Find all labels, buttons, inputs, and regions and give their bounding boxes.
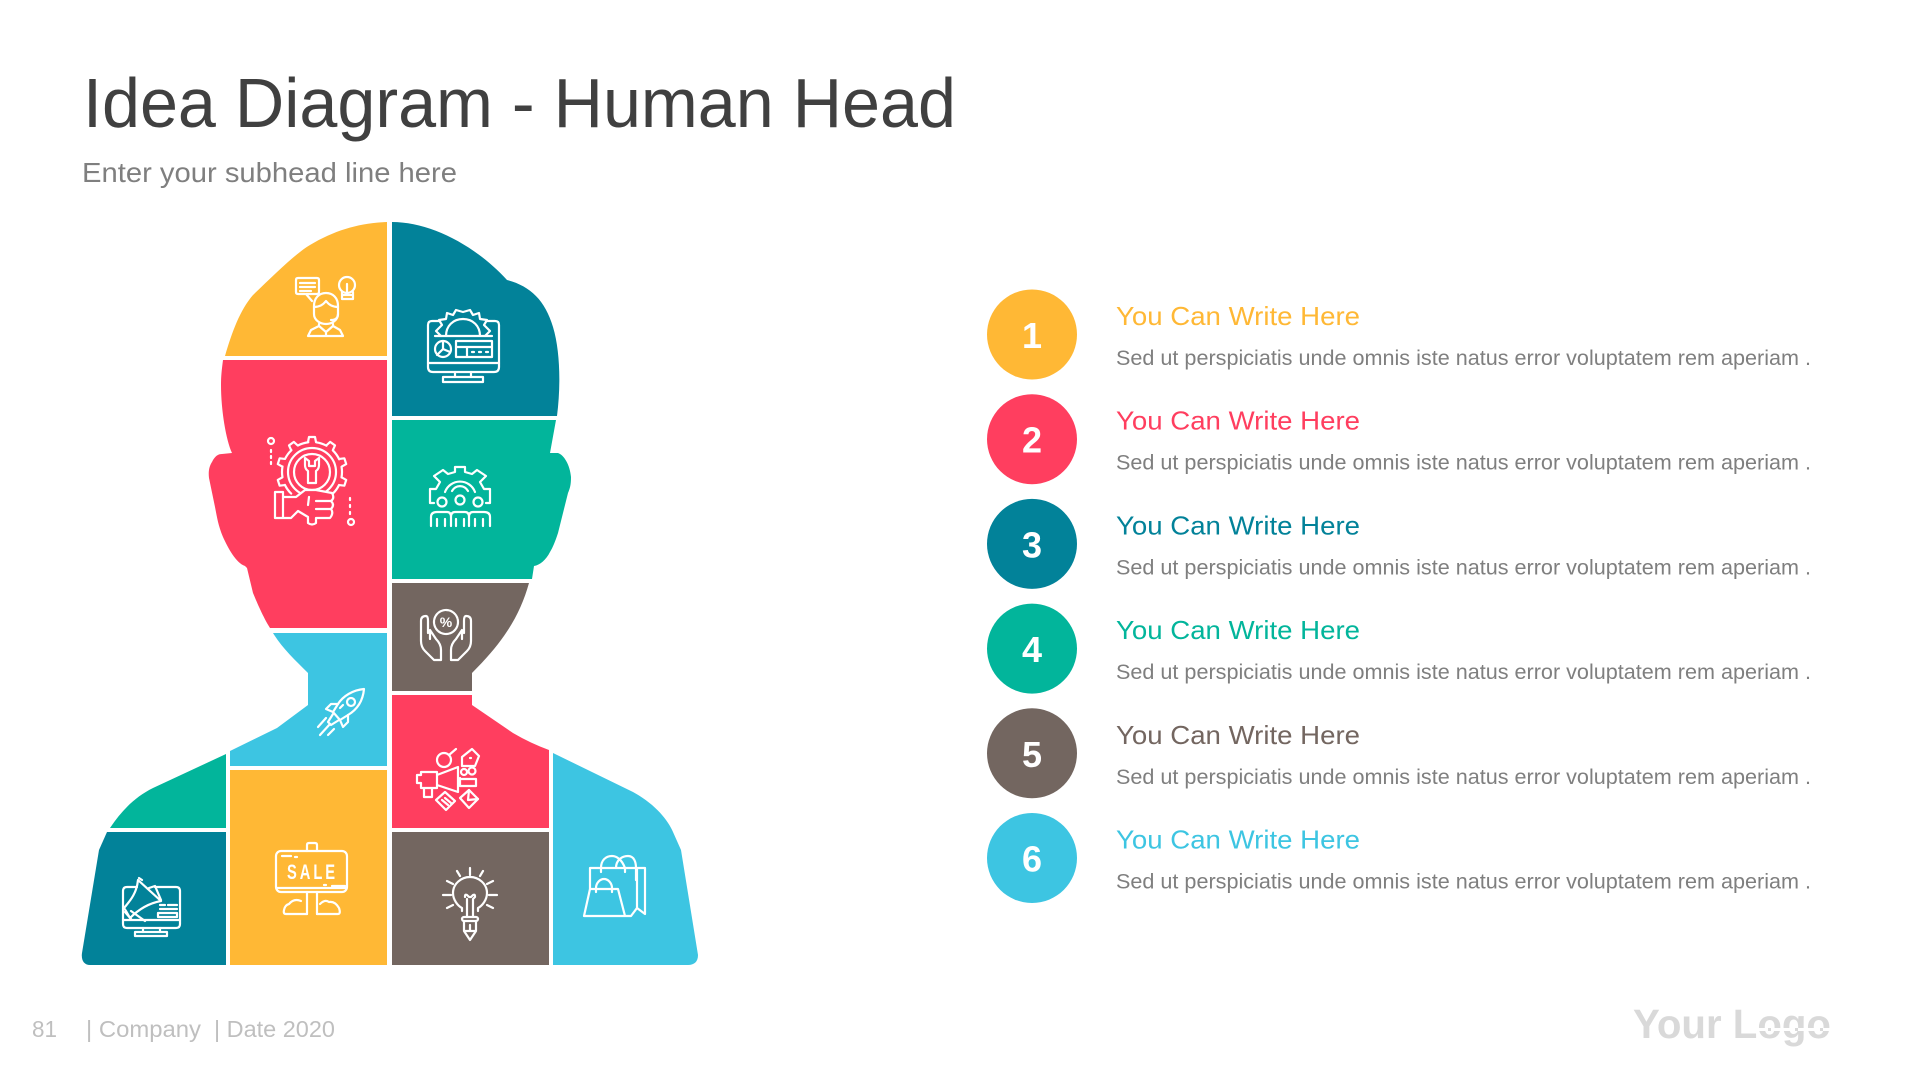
item 3: 3 — [1022, 524, 1042, 565]
segment: red chest — [392, 695, 549, 828]
head diagram — [82, 222, 698, 965]
item 4: You Can Write Here — [1116, 615, 1360, 645]
icon: shopping bags — [584, 856, 645, 916]
item 2: You Can Write Here — [1116, 406, 1360, 436]
segment: green face — [392, 420, 571, 579]
item 3: You Can Write Here — [1116, 510, 1360, 540]
item 6: Sed ut perspiciatis unde omnis iste natus error voluptatem rem aperiam . — [1116, 870, 1811, 894]
icon: hands holding percent badge: % — [440, 614, 453, 630]
title: Idea Diagram - Human Head — [83, 64, 956, 142]
icon: sale sign: SALE — [287, 860, 335, 884]
item 2: Sed ut perspiciatis unde omnis iste natus error voluptatem rem aperiam . — [1116, 452, 1811, 475]
icon: rocket — [318, 689, 364, 735]
icon: monitor with gear dashboard — [428, 310, 499, 382]
segment: cyan neck — [230, 633, 387, 766]
segment: teal crown — [392, 222, 559, 416]
item 5: You Can Write Here — [1116, 720, 1360, 750]
footer: | Date 2020 — [214, 1016, 335, 1042]
segment: yellow crown — [225, 222, 387, 356]
icon: monitor with megaphone — [123, 878, 180, 936]
item 4 — [987, 604, 1811, 694]
segment: red face — [209, 360, 387, 628]
item 1 — [987, 290, 1811, 380]
item 2 — [987, 394, 1811, 484]
logo: Your Logo — [1633, 1001, 1831, 1047]
subtitle: Enter your subhead line here — [82, 157, 457, 188]
item 1: Sed ut perspiciatis unde omnis iste natus error voluptatem rem aperiam . — [1116, 347, 1811, 370]
icon: hand holding wrench in gear — [268, 437, 354, 525]
segment: green shoulder — [110, 754, 226, 828]
item 6 — [987, 813, 1811, 903]
item 1: You Can Write Here — [1116, 301, 1360, 331]
item 6: You Can Write Here — [1116, 824, 1360, 854]
item 2: 2 — [1022, 420, 1042, 461]
item 5: Sed ut perspiciatis unde omnis iste natus error voluptatem rem aperiam . — [1116, 766, 1811, 789]
footer: 81 — [32, 1016, 57, 1042]
item 4: Sed ut perspiciatis unde omnis iste natus error voluptatem rem aperiam . — [1116, 661, 1811, 684]
icon: sale sign — [276, 843, 347, 914]
item 3 — [987, 499, 1811, 589]
icon: light bulb with pencil — [443, 868, 497, 940]
footer: | Company — [86, 1016, 201, 1042]
item 3: Sed ut perspiciatis unde omnis iste natus error voluptatem rem aperiam . — [1116, 556, 1811, 579]
item 5: 5 — [1022, 734, 1042, 775]
item 6: 6 — [1022, 838, 1042, 880]
footer — [32, 1016, 335, 1042]
item 1: 1 — [1022, 315, 1042, 356]
item 4: 4 — [1022, 629, 1042, 670]
segment: cyan arm — [553, 753, 698, 965]
icon: megaphone marketing — [417, 749, 479, 810]
segment: brown jaw — [392, 583, 529, 691]
segment: brown chest — [392, 832, 549, 965]
item 5 — [987, 708, 1811, 798]
segment: teal arm — [82, 832, 226, 965]
icon: support person with idea — [296, 277, 355, 336]
numbered list — [987, 290, 1811, 903]
icon: gear with team — [430, 467, 490, 526]
segment: yellow chest — [230, 770, 387, 965]
